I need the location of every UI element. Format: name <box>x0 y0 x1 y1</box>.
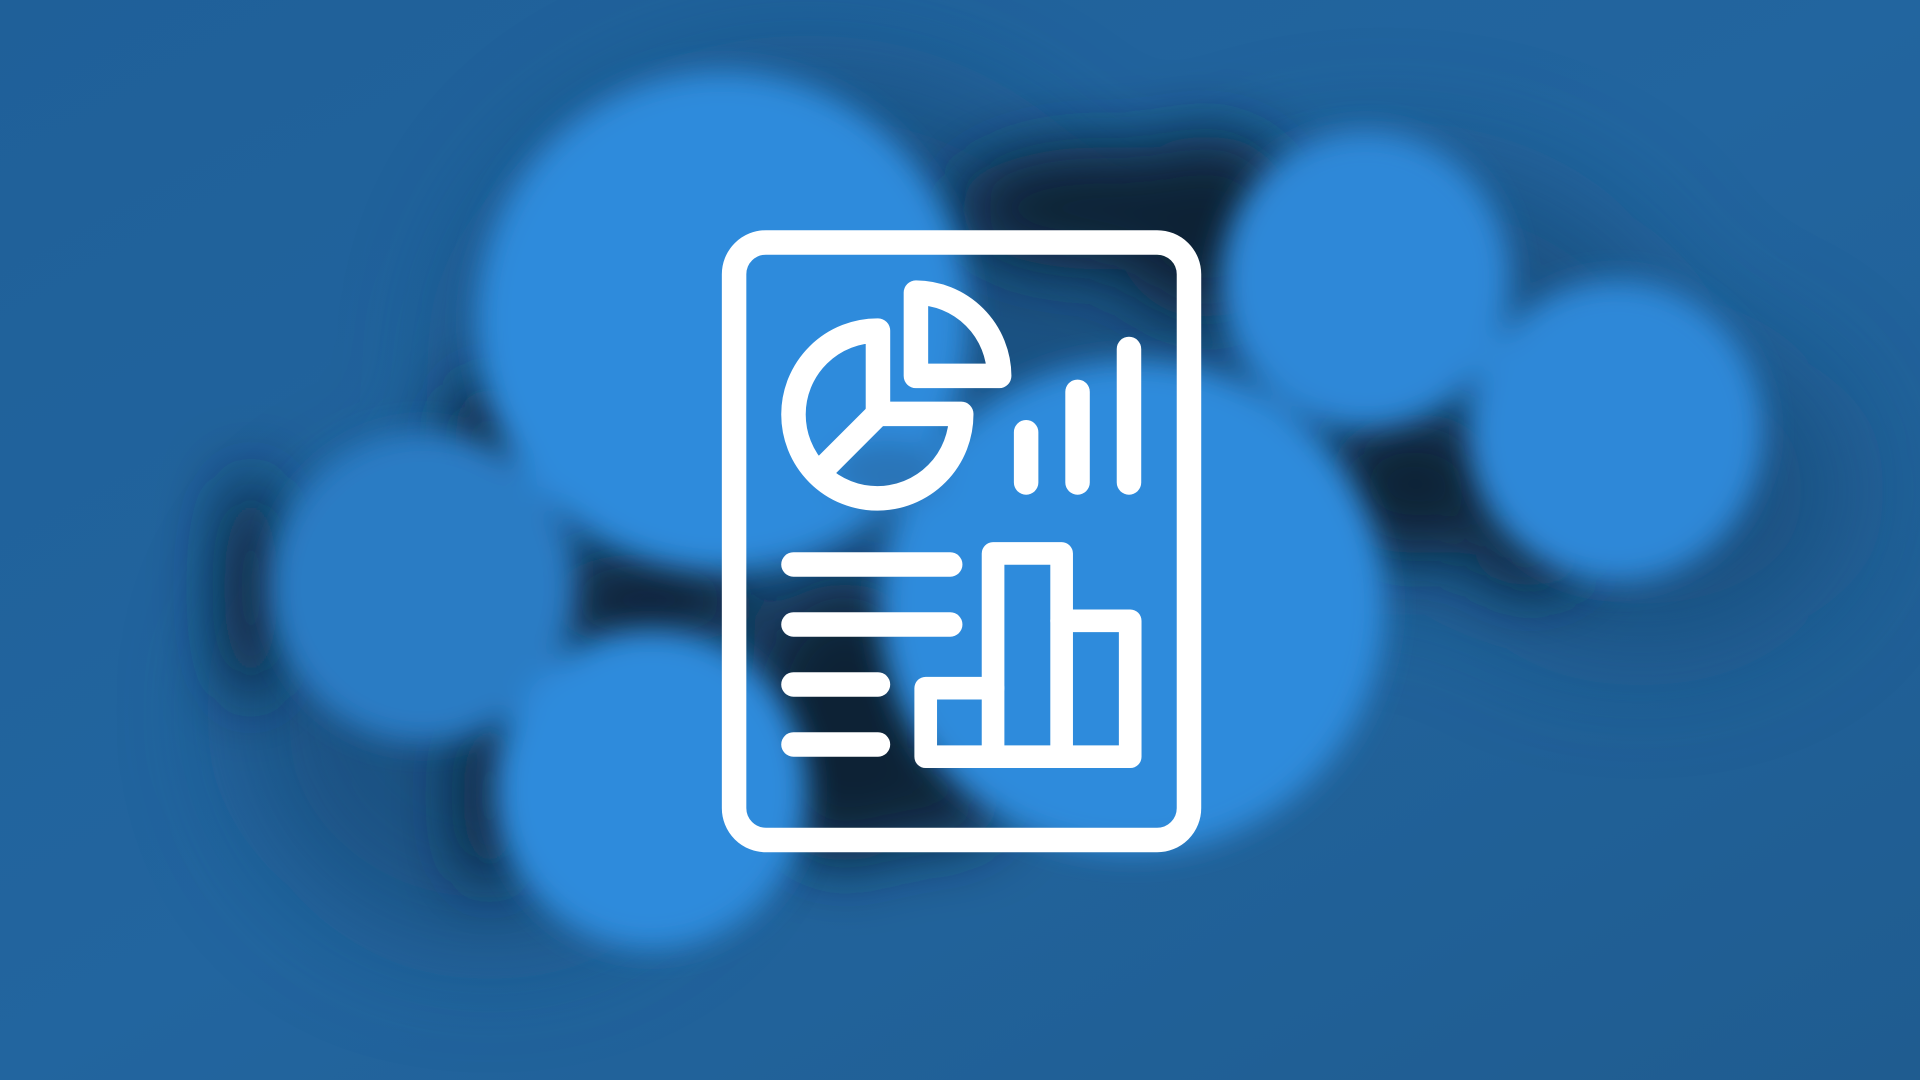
icon: bar chart <box>926 553 1130 757</box>
icon: pie chart <box>793 293 999 498</box>
document outline <box>734 242 1189 840</box>
shaded overlap near pie <box>833 441 943 502</box>
circle: upper centre <box>476 71 969 571</box>
circle: centre right <box>880 360 1385 852</box>
circle: left <box>271 431 574 742</box>
soft shadows <box>222 73 1849 943</box>
blurred circles <box>271 71 1763 949</box>
icon: text lines <box>793 564 950 744</box>
circle: upper right <box>1221 131 1510 427</box>
icon: signal bars <box>1026 349 1129 482</box>
circle: far right <box>1469 280 1763 582</box>
circle: lower left <box>496 631 807 949</box>
icon: report document <box>734 242 1189 840</box>
